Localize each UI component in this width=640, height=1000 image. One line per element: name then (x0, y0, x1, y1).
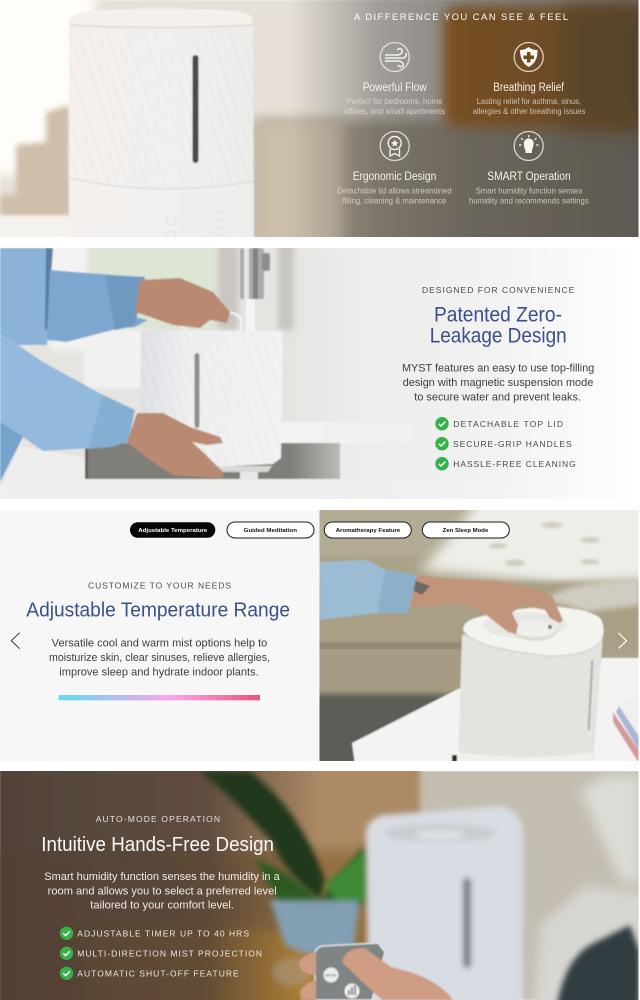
title: SMART Operation (487, 171, 571, 183)
hands (127, 278, 230, 478)
tab: zen sleep mode: Zen Sleep Mode (443, 528, 489, 534)
body text (402, 363, 594, 403)
description: filling, cleaning & maintenance (343, 197, 447, 206)
body text: tailored to your comfort level. (90, 900, 234, 912)
photo: filling the water tank at the sink (0, 248, 550, 499)
hand holding the remote (299, 948, 453, 1000)
label: AUTO-MODE OPERATION (96, 814, 220, 824)
description: humidity and recommends settings (469, 197, 589, 206)
left background (0, 510, 320, 761)
description: offices, and small apartments (344, 107, 445, 116)
heading: Intuitive Hands-Free Design (41, 833, 274, 856)
remote control (315, 943, 385, 1000)
item: multi-direction mist (60, 947, 262, 960)
mist (545, 580, 640, 612)
feature: ergonomic design (337, 132, 452, 206)
water tank (140, 312, 283, 480)
tabs (130, 522, 509, 538)
item: detachable top lid: DETACHABLE TOP LID (453, 419, 563, 429)
icon: wind (380, 42, 409, 72)
description (469, 187, 589, 206)
title: Powerful Flow (363, 82, 427, 94)
hero photo: humidifier in living room (0, 0, 640, 250)
item: hassle-free cleaning: HASSLE-FREE CLEANING (453, 459, 576, 469)
checklist (435, 417, 576, 470)
panel: designed for convenience (0, 248, 594, 499)
feature: breathing relief (473, 42, 585, 116)
arrow: previous (11, 633, 20, 649)
tab: adjustable temperature (130, 522, 215, 538)
description: Detachable lid allows streamlined (337, 187, 452, 196)
description (337, 187, 452, 206)
body text: MYST features an easy to use top-filling (402, 363, 594, 375)
humidifier (69, 8, 254, 240)
feature: smart operation (469, 132, 589, 206)
title: Ergonomic Design (353, 171, 436, 183)
item: secure-grip handles: SECURE-GRIP HANDLES (453, 439, 572, 449)
heading: Leakage Design (430, 324, 567, 347)
icon: shield (514, 42, 543, 72)
tab: zen sleep mode (422, 522, 509, 538)
humidifier (452, 607, 604, 765)
description: Lasting relief for asthma, sinus, (477, 97, 581, 106)
body text: moisturize skin, clear sinuses, relieve allergies, (49, 652, 270, 664)
heading: Adjustable Temperature Range (26, 599, 290, 622)
person: shirt (0, 248, 148, 482)
heading: A DIFFERENCE YOU CAN SEE & FEEL (354, 12, 568, 23)
temperature gradient bar (59, 695, 260, 700)
label: CUSTOMIZE TO YOUR NEEDS (88, 581, 231, 591)
description (344, 97, 445, 116)
description: Smart humidity function senses (476, 187, 582, 196)
tab: guided meditation: Guided Meditation (244, 528, 297, 534)
body text: improve sleep and hydrate indoor plants. (59, 666, 259, 678)
body text: design with magnetic suspension mode (403, 377, 593, 389)
description: allergies & other breathing issues (473, 107, 585, 116)
icon: light bulb (514, 132, 543, 160)
books (612, 706, 638, 761)
item: secure-grip handles (435, 437, 572, 450)
description (473, 97, 585, 116)
item: detachable top lid (435, 417, 563, 430)
arrow: next (618, 633, 626, 648)
body text (44, 871, 281, 912)
body text: room and allows you to select a preferred level (48, 885, 277, 897)
body text: to secure water and prevent leaks. (414, 391, 581, 403)
photo: hand on aroma dial (320, 510, 638, 761)
faucet and water (240, 248, 270, 334)
tab: guided meditation (227, 522, 314, 538)
title: Breathing Relief (493, 82, 565, 94)
feature: powerful flow (344, 42, 445, 116)
tab: adjustable temperature: Adjustable Temperature (138, 528, 208, 534)
body text (49, 638, 270, 678)
tab: aromatherapy feature: Aromatherapy Feature (336, 528, 401, 534)
remote control: MODE (326, 974, 337, 978)
blurred humidifier (366, 806, 523, 1000)
item: automatic shut-off: AUTOMATIC SHUT-OFF FEATURE (77, 969, 239, 979)
description: Perfect for bedrooms, home (347, 97, 443, 106)
tab: aromatherapy feature (324, 522, 411, 538)
heading (430, 304, 567, 347)
item: automatic shut-off (60, 967, 239, 980)
item: adjustable timer: ADJUSTABLE TIMER UP TO 40 HRS (77, 929, 249, 939)
heading: Patented Zero- (434, 304, 562, 327)
panel: adjustable temperature (10, 510, 638, 761)
arm and hand (320, 560, 563, 634)
body text: Smart humidity function senses the humidity in a (44, 871, 281, 883)
icon: award ribbon (380, 132, 409, 160)
body text: Versatile cool and warm mist options help to (52, 638, 267, 650)
blanket and cushions (533, 775, 640, 1000)
checklist (60, 927, 262, 980)
item: multi-direction mist: MULTI-DIRECTION MIST PROJECTION (77, 949, 262, 959)
panel: auto-mode operation (0, 760, 640, 1000)
panel: a difference you can see and feel (0, 0, 640, 250)
item: adjustable timer (60, 927, 249, 940)
label: DESIGNED FOR CONVENIENCE (422, 285, 575, 295)
item: hassle-free cleaning (435, 457, 576, 470)
photo: remote control and blurred humidifier (0, 760, 640, 1000)
